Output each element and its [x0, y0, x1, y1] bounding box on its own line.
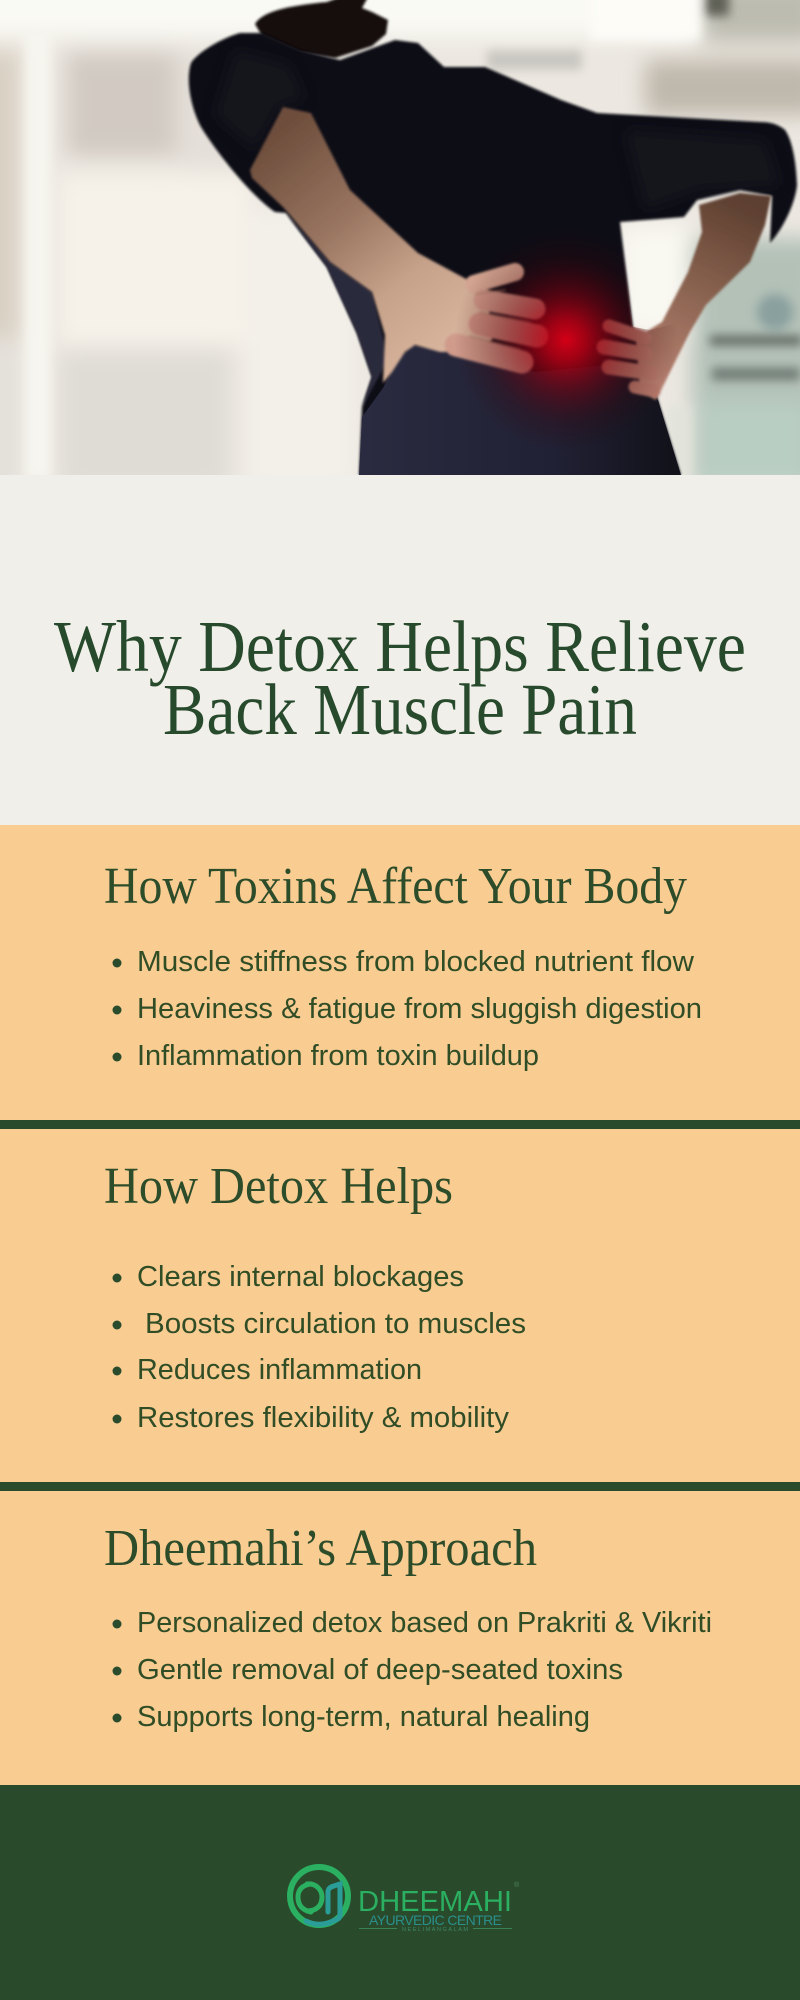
- logo subtitle: AYURVEDIC CENTRE: [369, 1912, 502, 1928]
- divider bar: [0, 1120, 800, 1129]
- title: [54, 606, 746, 750]
- photo: man holding lower back with red pain glow: [0, 0, 800, 495]
- heading: How Detox Helps: [104, 1158, 453, 1215]
- left forearm and hand: [250, 107, 537, 383]
- figure: man: [189, 0, 797, 475]
- bullet list: Clears internal blockages: [137, 1261, 464, 1293]
- bullet list: Heaviness & fatigue from sluggish digestion: [137, 993, 702, 1025]
- hair: [255, 0, 388, 58]
- heading: Dheemahi’s Approach: [104, 1520, 537, 1577]
- panel: how toxins affect your body: [0, 825, 800, 1120]
- bullet list: Gentle removal of deep-seated toxins: [137, 1654, 623, 1686]
- registered mark: ®: [514, 1881, 520, 1889]
- icon: logo mark: [290, 1867, 348, 1925]
- bullet list: [112, 1607, 712, 1733]
- divider bar: [0, 1482, 800, 1491]
- panel: footer: [0, 1785, 800, 2000]
- red pain glow: [460, 250, 669, 430]
- logo: Dheemahi Ayurvedic Centre: [290, 1867, 520, 1933]
- bullet list: Muscle stiffness from blocked nutrient flow: [137, 946, 695, 978]
- bullet list: Inflammation from toxin buildup: [137, 1040, 539, 1072]
- bullet list: Reduces inflammation: [137, 1354, 422, 1386]
- panel: dheemahi's approach: [0, 1491, 800, 1785]
- bullet list: Boosts circulation to muscles: [145, 1308, 526, 1340]
- shirt folds and shading: [698, 189, 758, 201]
- panel: how detox helps: [0, 1129, 800, 1482]
- left torso side: [286, 213, 388, 407]
- background: title band: [0, 475, 800, 825]
- photo background: blurred window interior: [0, 0, 800, 495]
- title: Back Muscle Pain: [163, 669, 637, 750]
- heading: How Toxins Affect Your Body: [104, 858, 687, 915]
- bullet list: [112, 946, 702, 1072]
- bullet list: Personalized detox based on Prakriti & Vikriti: [137, 1607, 712, 1639]
- right forearm and hand: [604, 193, 771, 400]
- bullet list: Restores flexibility & mobility: [137, 1402, 509, 1434]
- logo wordmark: DHEEMAHI: [358, 1886, 512, 1918]
- bullet list: Supports long-term, natural healing: [137, 1701, 590, 1733]
- shirt: [189, 33, 797, 475]
- title: Why Detox Helps Relieve: [54, 606, 746, 687]
- bullet list: [112, 1261, 526, 1434]
- logo location: NEELIMANGALAM: [402, 1927, 468, 1933]
- pants: [359, 345, 681, 475]
